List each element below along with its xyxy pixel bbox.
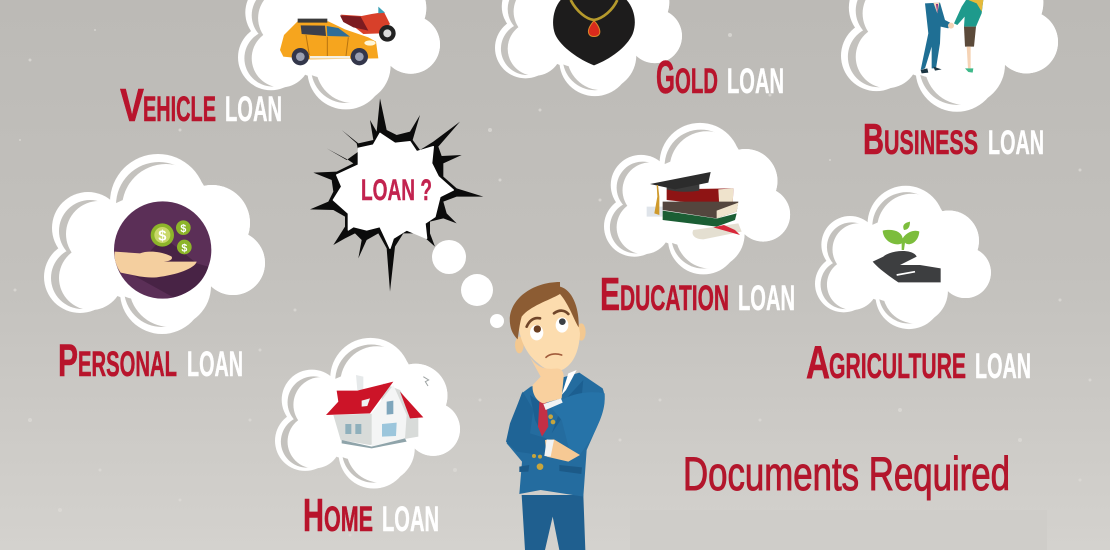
shirt and tie — [538, 402, 548, 437]
icon: hand with coins: $ — [158, 228, 166, 244]
label: agriculture loan: GRICULTURE — [829, 347, 966, 386]
jacket — [507, 373, 605, 497]
label: education loan: DUCATION — [620, 279, 729, 318]
label: home loan — [303, 489, 439, 541]
hair — [510, 282, 579, 339]
left hand and cuff — [545, 439, 580, 462]
icon: hand with coins: $ — [180, 223, 186, 235]
icon: gold necklace — [553, 0, 635, 65]
face — [518, 293, 580, 371]
label: vehicle loan — [120, 79, 282, 131]
cloud: education loan — [604, 123, 790, 274]
cloud: vehicle loan — [238, 0, 440, 109]
lapels — [530, 380, 583, 437]
icon: car and motorbike — [280, 7, 396, 65]
label: vehicle loan: V — [120, 79, 144, 131]
label: agriculture loan — [806, 336, 1031, 388]
cloud: personal loan — [44, 154, 265, 334]
hand at chin — [530, 357, 564, 403]
label: gold loan: G — [656, 51, 675, 103]
label: agriculture loan: LOAN — [975, 347, 1031, 386]
label: gold loan: LOAN — [727, 62, 784, 101]
label: business loan: B — [863, 115, 884, 164]
icon: graduation cap and books — [647, 172, 742, 239]
label: gold loan: OLD — [675, 62, 718, 101]
ears — [577, 323, 586, 341]
legs — [522, 495, 585, 550]
label: education loan: LOAN — [738, 279, 795, 318]
thought bubbles — [432, 240, 504, 328]
label: home loan: LOAN — [382, 500, 439, 539]
label: education loan — [600, 268, 795, 320]
label: vehicle loan: EHICLE — [143, 90, 216, 129]
pockets — [519, 465, 582, 474]
label: home loan: H — [303, 489, 324, 541]
icon: hand with coins — [114, 201, 211, 299]
label: business loan: LOAN — [988, 124, 1044, 162]
eyes — [530, 325, 543, 340]
cloud: agriculture loan — [815, 186, 991, 329]
man thinking — [506, 282, 605, 550]
label: vehicle loan: LOAN — [225, 90, 282, 129]
cloud: business loan — [841, 0, 1058, 112]
icon: house — [326, 375, 429, 448]
cloud: gold loan — [495, 0, 682, 96]
label: personal loan: ERSONAL — [78, 345, 177, 384]
label: personal loan: P — [58, 335, 78, 386]
label: personal loan — [58, 335, 243, 386]
label: personal loan: LOAN — [187, 345, 243, 384]
label: home loan: OME — [324, 500, 373, 539]
icon: plant in hand — [873, 222, 941, 282]
right arm — [552, 392, 605, 455]
buttons — [532, 414, 555, 470]
label: business loan — [863, 115, 1044, 164]
label: agriculture loan: A — [806, 336, 830, 388]
label: business loan: USINESS — [884, 124, 978, 162]
burst label: LOAN ? — [361, 174, 432, 207]
left arm — [506, 392, 552, 457]
label: education loan: E — [600, 268, 620, 320]
icon: hand with coins: $ — [181, 242, 187, 254]
panel: documents box — [630, 510, 1047, 550]
cuff — [543, 398, 563, 410]
cloud: home loan — [275, 338, 460, 488]
label: gold loan — [656, 51, 784, 103]
icon: business people handshake — [921, 0, 983, 73]
icon: speech burst — [310, 98, 483, 292]
